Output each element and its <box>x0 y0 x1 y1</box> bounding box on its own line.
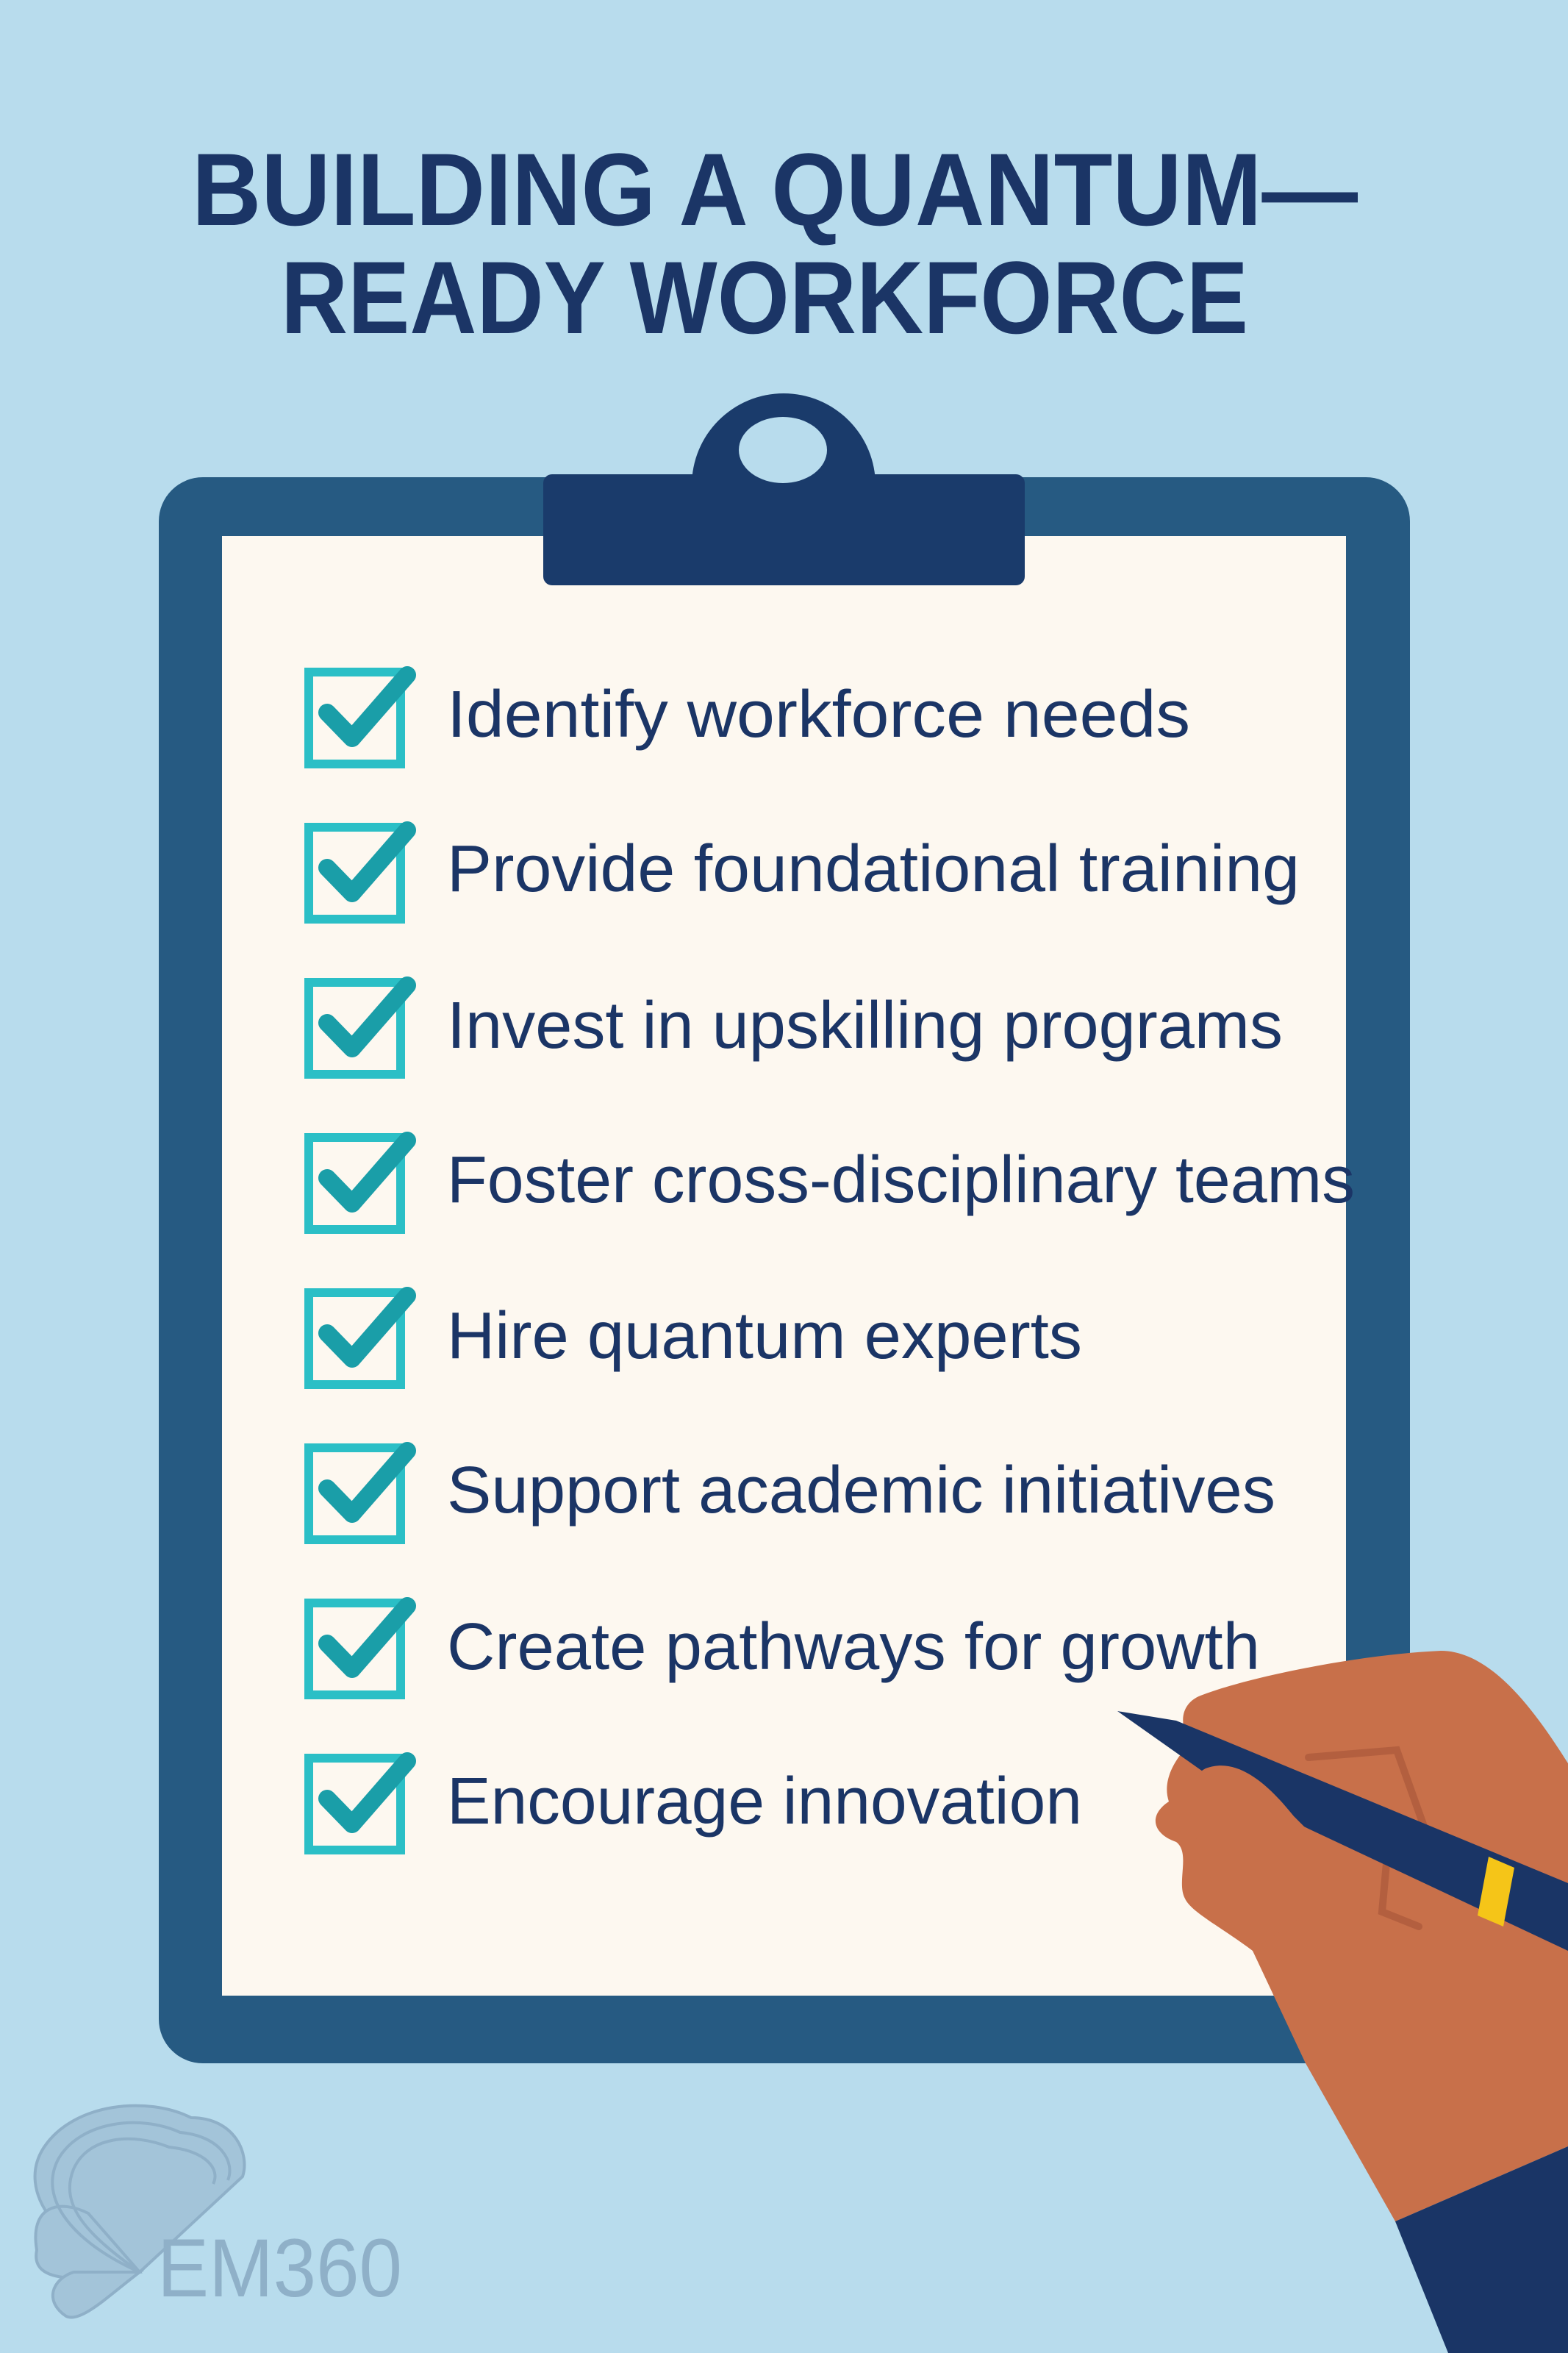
hand with pen <box>1117 1651 1568 2353</box>
checklist <box>309 672 1355 1850</box>
item 8 <box>309 1758 407 1850</box>
title: BUILDING A QUANTUM— <box>192 132 1358 247</box>
item 7 <box>309 1603 407 1695</box>
item 6 <box>309 1448 407 1540</box>
clipboard <box>159 393 1410 2063</box>
title <box>192 132 1358 355</box>
pen <box>1117 1711 1568 1951</box>
sleeve <box>1395 2146 1568 2353</box>
item 5 <box>309 1293 407 1385</box>
item labels: Hire quantum experts <box>447 1299 1082 1373</box>
item labels: Create pathways for growth <box>447 1610 1260 1684</box>
item labels: Provide foundational training <box>447 832 1300 906</box>
clip <box>543 393 1025 585</box>
item labels: Encourage innovation <box>447 1765 1082 1838</box>
finger over pen <box>1189 1765 1360 1951</box>
item 4 <box>309 1138 407 1229</box>
item 1 <box>309 672 407 764</box>
paper <box>222 536 1346 1996</box>
logo: EM360: EM360 <box>157 2222 402 2314</box>
item labels: Invest in upskilling programs <box>447 989 1283 1063</box>
item labels <box>447 678 1355 1838</box>
item 2 <box>309 827 407 919</box>
logo: EM360 <box>35 2106 402 2318</box>
item labels: Identify workforce needs <box>447 678 1190 751</box>
item 3 <box>309 982 407 1074</box>
item labels: Foster cross-disciplinary teams <box>447 1143 1355 1217</box>
item labels: Support academic initiatives <box>447 1454 1275 1527</box>
hand <box>1156 1651 1568 2221</box>
title: READY WORKFORCE <box>281 240 1248 355</box>
